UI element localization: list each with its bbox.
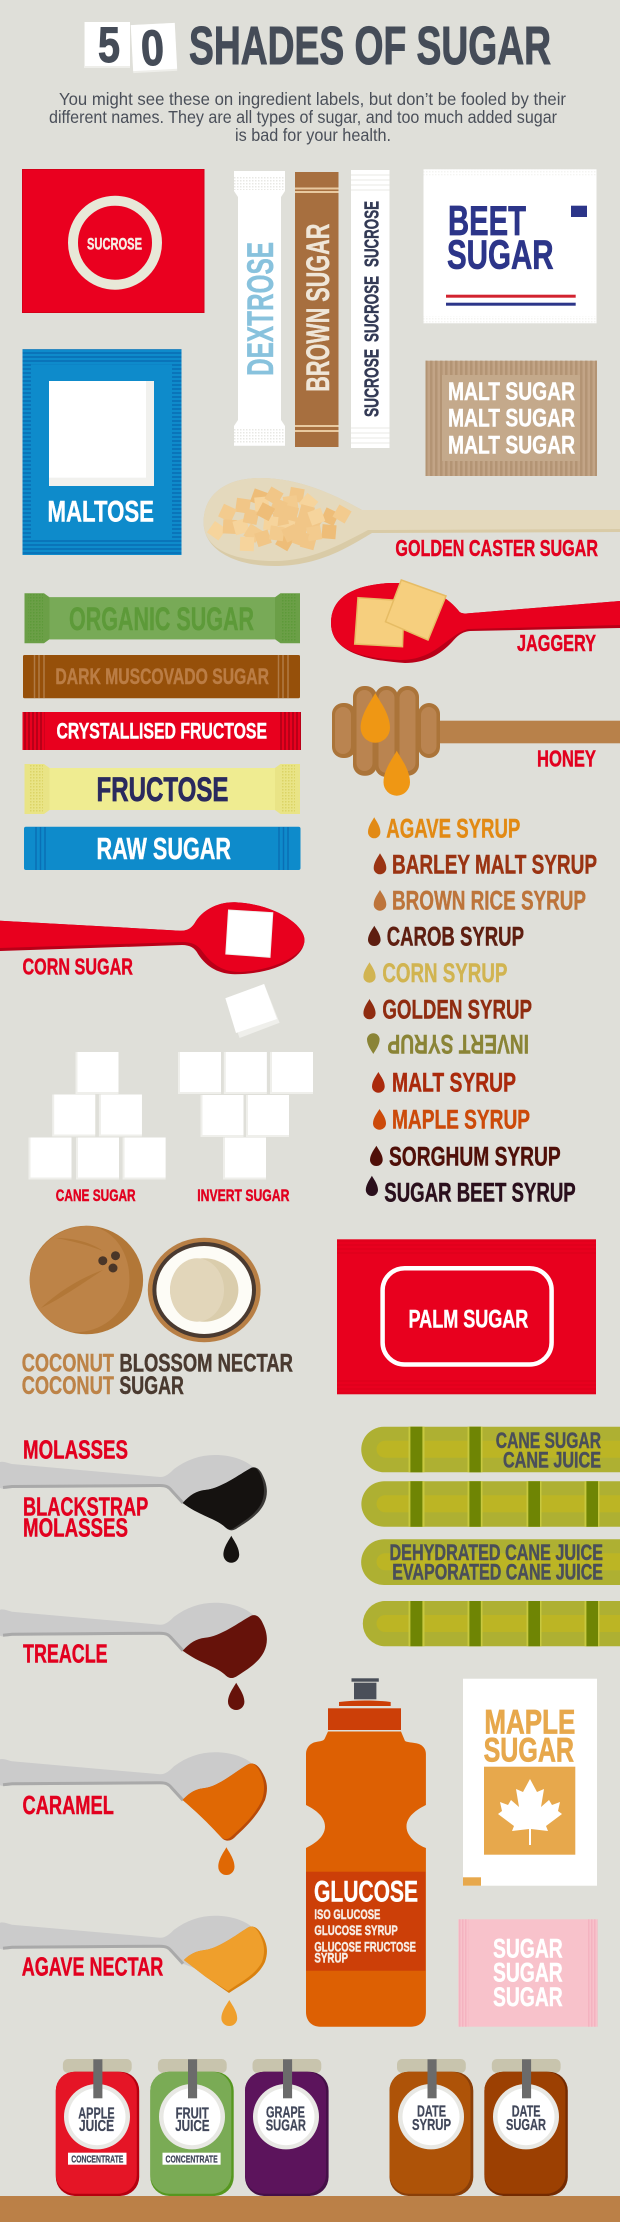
label: blackstrap molasses: [23, 1492, 148, 1543]
jar: fruit juice concentrate: [150, 2059, 234, 2196]
cane sugar cube pyramid: [28, 1052, 166, 1180]
jar: grape sugar: [245, 2059, 329, 2196]
beet sugar sachet: SUGAR: [447, 231, 554, 277]
carob syrup: CAROB SYRUP: [387, 921, 524, 951]
sugar cane stalk 4: [363, 1601, 620, 1646]
label: coconut blossom nectar, coconut sugar: COCONUT: [22, 1350, 114, 1378]
label: coconut blossom nectar, coconut sugar: COCONUT: [22, 1372, 114, 1400]
golden syrup: GOLDEN SYRUP: [382, 994, 532, 1024]
jar: date syrup: SYRUP: [412, 2117, 451, 2134]
spoon: treacle: [0, 1603, 267, 1710]
organic sugar bar: [24, 593, 300, 643]
carob syrup: [368, 921, 524, 951]
sugar cane stalk 2: [361, 1481, 620, 1527]
title: [84, 16, 551, 77]
maple syrup: [373, 1105, 530, 1135]
maple syrup: MAPLE SYRUP: [392, 1105, 530, 1135]
label: caramel: CARAMEL: [22, 1790, 114, 1820]
fructose bar: [24, 764, 300, 814]
pink sugar sachet: SUGAR: [493, 1934, 563, 1964]
jar: apple juice concentrate: APPLE: [78, 2105, 115, 2122]
label: treacle: TREACLE: [23, 1639, 108, 1669]
sugar cane stalk 1: [361, 1427, 620, 1472]
maple sugar sachet: [463, 1679, 597, 1886]
intro text: You might see these on ingredient labels, but don’t be fooled by their: [59, 89, 566, 109]
crystallised fructose bar: CRYSTALLISED FRUCTOSE: [56, 719, 267, 744]
falling sugar cube: [225, 984, 280, 1038]
jar: date syrup: [390, 2059, 473, 2196]
spoon: caramel: [0, 1752, 267, 1875]
treacle drop: [228, 1683, 244, 1710]
palm sugar sachet: PALM SUGAR: [408, 1305, 528, 1333]
honey drop upper: [361, 693, 390, 743]
glucose label band: GLUCOSE: [314, 1876, 418, 1909]
number card 5: 5: [98, 17, 120, 73]
malt sugar sachet: [426, 361, 597, 476]
label: corn sugar: CORN SUGAR: [22, 954, 133, 980]
caramel drop: [218, 1847, 234, 1875]
invert syrup upside down: INVERT SYRUP: [388, 1029, 529, 1059]
agave drop: [221, 2000, 237, 2026]
pink sugar sachet: [458, 1919, 598, 2027]
malt sugar sachet: MALT SUGAR: [448, 378, 575, 406]
corn sugar red spoon: [0, 902, 304, 974]
agave syrup: [368, 813, 520, 843]
dark muscovado sugar bar: [23, 655, 300, 698]
glucose bottle: [306, 1678, 426, 2027]
palm sugar sachet: [337, 1239, 596, 1394]
invert sugar inverted cube pyramid: [178, 1052, 313, 1180]
dextrose stick: DEXTROSE: [240, 242, 281, 376]
syrup list: [363, 813, 597, 1208]
raw sugar bar: [24, 827, 300, 870]
whole coconut: [30, 1226, 143, 1334]
number card 5: [84, 17, 130, 73]
fructose bar: FRUCTOSE: [96, 771, 228, 809]
jar: fruit juice concentrate: JUICE: [175, 2118, 210, 2135]
jaggery cube left: [355, 598, 404, 647]
golden syrup: [363, 994, 532, 1024]
jar: apple juice concentrate: CONCENTRATE: [71, 2154, 124, 2165]
label: honey: HONEY: [537, 746, 596, 772]
jar: fruit juice concentrate: CONCENTRATE: [166, 2154, 218, 2165]
malt sugar sachet: MALT SUGAR: [448, 431, 575, 459]
label: invert sugar: INVERT SUGAR: [197, 1187, 289, 1205]
sorghum syrup: SORGHUM SYRUP: [389, 1141, 561, 1171]
number card 0: [131, 19, 177, 77]
label: coconut blossom nectar, coconut sugar: SUGAR: [119, 1372, 184, 1400]
label: coconut blossom nectar, coconut sugar: BLOSSOM NECTAR: [119, 1350, 293, 1378]
sucrose stick: [351, 170, 390, 448]
corn syrup: CORN SYRUP: [382, 958, 507, 988]
jar: date sugar: [484, 2059, 568, 2196]
jaggery cube right: [386, 580, 446, 640]
brown sugar stick: BROWN SUGAR: [300, 224, 336, 392]
jar: apple juice concentrate: JUICE: [79, 2118, 114, 2135]
pink sugar sachet: SUGAR: [493, 1982, 563, 2012]
sucrose sachet: [22, 170, 204, 312]
molasses drop: [223, 1536, 239, 1563]
organic sugar bar: ORGANIC SUGAR: [69, 601, 254, 637]
glucose label band: GLUCOSE SYRUP: [314, 1922, 398, 1938]
honey drop lower: [384, 751, 410, 796]
sugar crystals: [207, 486, 352, 551]
jar: date sugar: DATE: [512, 2104, 541, 2121]
malt syrup: [372, 1067, 516, 1097]
jaggery red spoon: [331, 580, 620, 663]
brown sugar stick: [295, 172, 338, 447]
raw sugar bar: RAW SUGAR: [96, 831, 231, 866]
label: agave nectar: AGAVE NECTAR: [22, 1952, 163, 1982]
maple sugar sachet: MAPLE: [484, 1703, 575, 1741]
sucrose sachet: SUCROSE: [87, 234, 142, 254]
sucrose stick: SUCROSE: [360, 276, 384, 342]
maltose sachet: [22, 349, 182, 555]
corn syrup: [363, 958, 507, 988]
jar: grape sugar: SUGAR: [266, 2118, 306, 2135]
jar: date sugar: SUGAR: [506, 2117, 546, 2134]
agave syrup: AGAVE SYRUP: [386, 813, 520, 843]
halved coconut: [148, 1238, 261, 1342]
sucrose stick: SUCROSE: [360, 349, 384, 417]
sugar cube in spoon: [226, 910, 273, 957]
jar: grape sugar: GRAPE: [266, 2104, 305, 2121]
spoon: blackstrap molasses: [0, 1455, 267, 1563]
glucose label band: GLUCOSE FRUCTOSE: [314, 1939, 416, 1955]
icon: maple leaf: [498, 1779, 562, 1845]
label: blackstrap molasses: MOLASSES: [23, 1513, 128, 1543]
intro text: [49, 89, 566, 145]
number card 0: 0: [140, 19, 165, 77]
glucose label band: [306, 1872, 426, 1971]
sorghum syrup: [370, 1141, 561, 1171]
label: blackstrap molasses: BLACKSTRAP: [23, 1492, 148, 1522]
label: cane sugar: CANE SUGAR: [56, 1187, 136, 1205]
intro text: is bad for your health.: [235, 125, 391, 145]
jar: date syrup: DATE: [417, 2104, 446, 2121]
beet sugar sachet: [424, 169, 596, 323]
shelf: [0, 2196, 620, 2222]
honey dipper: [332, 686, 620, 796]
jar: apple juice concentrate: [56, 2059, 139, 2196]
label: coconut blossom nectar, coconut sugar: [22, 1350, 293, 1400]
label: molasses: MOLASSES: [23, 1434, 128, 1464]
pink sugar sachet: SUGAR: [493, 1958, 563, 1988]
beet sugar sachet: BEET: [448, 197, 526, 244]
malt sugar sachet: MALT SUGAR: [448, 405, 575, 433]
glucose label band: ISO GLUCOSE: [314, 1906, 380, 1922]
sucrose stick: SUCROSE: [360, 201, 384, 267]
jar: fruit juice concentrate: FRUIT: [176, 2105, 209, 2122]
glucose label band: SYRUP: [314, 1950, 348, 1966]
malt syrup: MALT SYRUP: [392, 1067, 516, 1097]
sugar cane stalk 3: [361, 1539, 620, 1585]
crystallised fructose bar: [22, 712, 301, 750]
dark muscovado sugar bar: DARK MUSCOVADO SUGAR: [55, 664, 269, 689]
dextrose stick: [234, 171, 285, 446]
maple sugar sachet: SUGAR: [484, 1732, 574, 1770]
spoon: agave nectar: [0, 1916, 267, 2026]
wooden spoon with golden caster sugar: [204, 478, 620, 566]
intro text: different names. They are all types of sugar, and too much added sugar: [49, 107, 557, 127]
maltose sachet: MALTOSE: [48, 496, 154, 529]
